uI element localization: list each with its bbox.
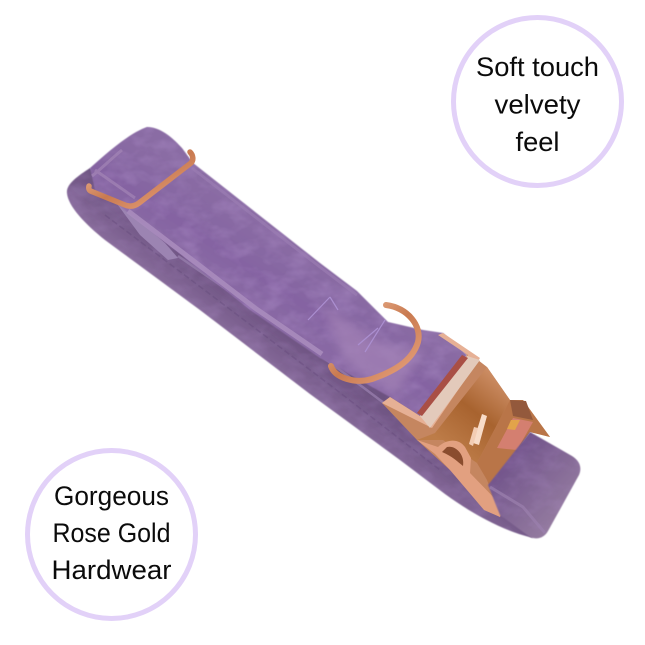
buckle far frame (382, 333, 480, 428)
quick-release buckle (382, 333, 550, 517)
callout: soft touch (454, 18, 622, 186)
collar back strap (60, 160, 540, 545)
buckle right arm (477, 400, 550, 488)
slider buckle (89, 152, 193, 206)
callout: rose gold hardware (28, 450, 196, 618)
stitching (308, 297, 385, 352)
product: purple velvet dog collar (60, 120, 585, 545)
buckle side clip (417, 440, 503, 517)
D-ring (331, 305, 419, 381)
callout: rose gold hardware: Gorgeous (54, 481, 169, 511)
callout: soft touch: Soft touch (476, 52, 599, 82)
collar front strap (85, 120, 475, 425)
buckle backing (382, 333, 550, 517)
callout: rose gold hardware: Hardwear (52, 555, 172, 585)
buckle central plate (417, 367, 510, 463)
callout: soft touch: feel (516, 127, 560, 157)
collar end tab (488, 432, 581, 539)
callout: rose gold hardware: Rose Gold (52, 518, 170, 548)
callout: soft touch: velvety (494, 90, 581, 120)
